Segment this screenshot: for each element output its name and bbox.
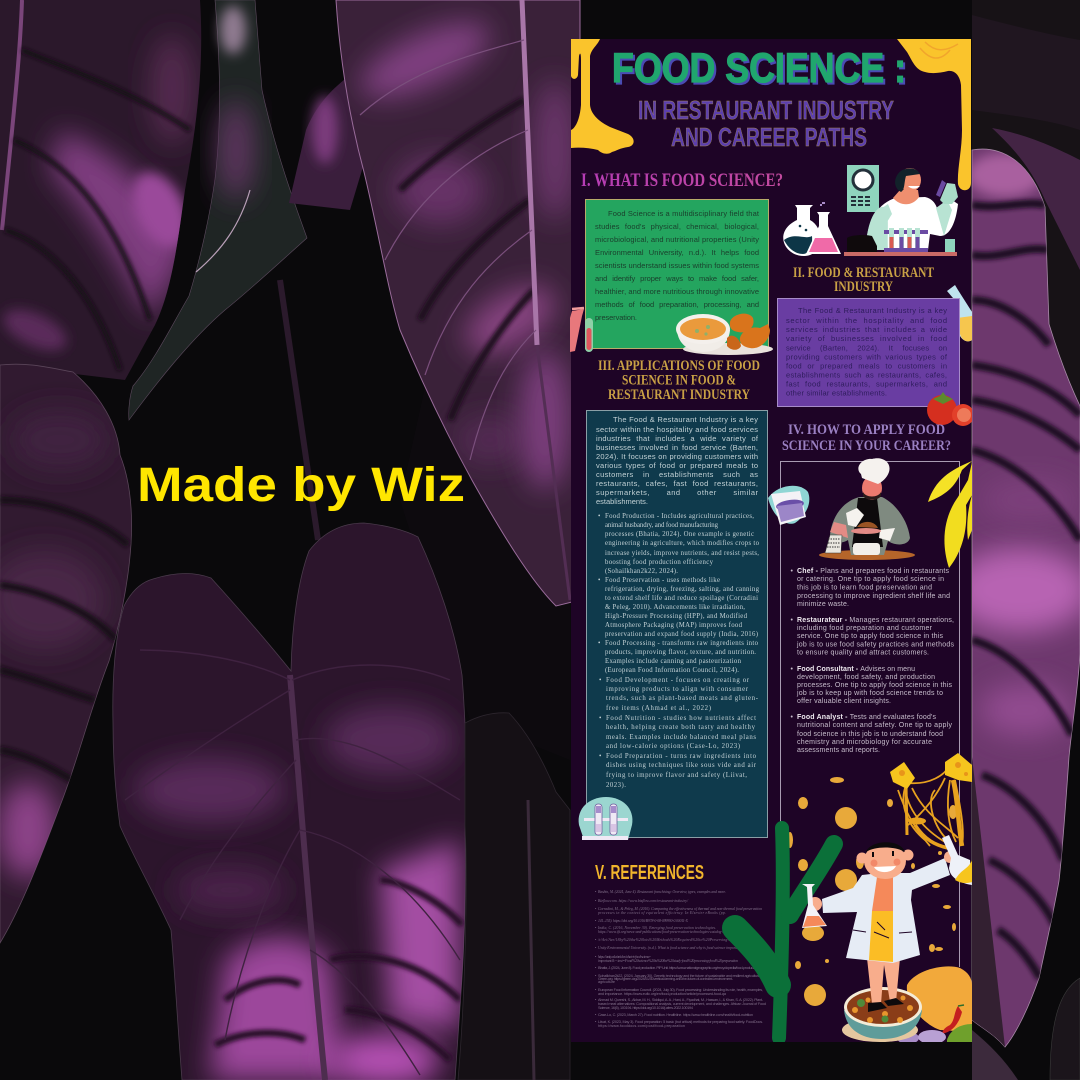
references list: Green.org. https://green.org/2024/01/30/vertical-farming-and-the-future-of-controlled-environment- [598, 977, 734, 981]
references list: Unity Environmental University. (n.d.). What is food science and why is food science important? [598, 946, 743, 950]
heading III: RESTAURANT INDUSTRY [608, 387, 750, 403]
references list: • [595, 998, 597, 1002]
bullet list: Food Production - Includes agricultural practices, [605, 513, 754, 520]
career list: • [790, 568, 794, 575]
intro text: various types of food or prepared meals to [596, 461, 758, 470]
references list: and importance. https://www.eufic.org/en/food-production/article/processed-food-qa [598, 992, 727, 996]
legs [867, 958, 900, 1004]
intro text [596, 415, 759, 506]
career list: Chef - Plans and prepares food in restaurants [797, 568, 950, 575]
body text: other similar establishments. [786, 388, 887, 398]
references list: agriculture [598, 980, 615, 984]
body text: food or prepared meals to customers in [786, 362, 947, 370]
references list: Bhatia, J. (2024, June 8). Food production. PIP Unit. https://www.nationalgeographic.org/encyclopedia/food-production [598, 966, 758, 970]
icon: yellow leaves [928, 461, 972, 568]
bullet list: boosting food production efficiency [605, 559, 714, 566]
career list: processes. One tip to apply food science in this [797, 682, 952, 689]
body text: fast food restaurants, supermarkets, and [786, 380, 947, 388]
references list: important/#:~:text=Food%20science%20is%20the%20study-food%20processing-food%20preparation [598, 959, 738, 963]
leaf: bottom centre [113, 523, 466, 1080]
references list: Bashin, M. (2024, June 4). Restaurant franchising: Overview, types, examples and more. [598, 890, 726, 895]
leaf: bottom right dark [458, 713, 570, 1080]
left flask [802, 884, 827, 928]
body text: providing customers with various types of [786, 352, 948, 362]
references list: processes in the context of equivalent efficiency. In Elsevier eBooks (pp. [597, 911, 726, 915]
career list: or catering. One tip to apply food science in [797, 576, 944, 583]
heading IV [782, 424, 950, 450]
references list: Ahmad M. Qureshi, S., Akbar, M. H., Siddiqui, A. A., Hani, A., Fiyadhat, M., Hassan, I., & Khan, S. A. (2022). Plant- [598, 998, 764, 1002]
career list: Food Analyst - Tests and evaluates food's [797, 714, 936, 721]
heading IV: IV. HOW TO APPLY FOOD [788, 422, 945, 438]
references list: 141–155). https://doi.org/10.1016/B978-0-08-099990-0.00011-X [598, 919, 689, 923]
heading III [598, 360, 760, 399]
bullet list: High-Pressure Processing (HPP), and Modified [605, 613, 748, 620]
bullet list: • [599, 753, 601, 760]
poster background [571, 39, 971, 1042]
illustration: chef [819, 458, 915, 560]
subtitle: AND CAREER PATHS [671, 122, 867, 152]
bullet list: Food Preparation - turns raw ingredients into [606, 753, 757, 760]
bullet list: • [599, 677, 601, 684]
leaf: small behind [289, 76, 368, 210]
body text: Environmental University, n.d.). It helps food [595, 248, 759, 257]
career list: • [790, 666, 794, 673]
bullet list: engineering in agriculture, which modifies crops to [605, 540, 760, 547]
bench [844, 252, 957, 256]
body text: sector within the hospitality and food [786, 316, 947, 325]
heading I: I. WHAT IS FOOD SCIENCE? [581, 170, 783, 191]
hands [808, 851, 956, 911]
references list: • [595, 1020, 597, 1024]
bullet list: • [598, 513, 600, 520]
references list: • [595, 955, 597, 959]
career list: assessments and reports. [797, 747, 880, 754]
bullet list: free items (Ahmad et al., 2022) [606, 705, 711, 712]
bullet list [598, 513, 760, 789]
career list: minimize waste. [797, 601, 849, 608]
bullet list: refrigeration, drying, freezing, salting, and canning [605, 586, 760, 593]
career list: Food Consultant - Advises on menu [797, 666, 915, 673]
references list: Science, 16(5), 100194. https://doi.org/10.1016/j.afres.2022.100194 [598, 1006, 693, 1010]
references list: • [595, 946, 597, 950]
bullet list: 2023). [606, 782, 626, 789]
bullet list: Food Preservation - uses methods like [605, 577, 720, 584]
panel: career box [780, 458, 960, 967]
intro text: The Food & Restaurant Industry is a key [613, 415, 758, 424]
leaf: centre stem [280, 280, 318, 540]
bullet list: processes (Bhatia, 2024). One example is genetic [605, 531, 754, 538]
intro text: industries that includes a wide variety of [596, 434, 759, 443]
body text: microbiological, and nutritional properties (Unity [595, 235, 759, 244]
intro text: 2024). It focuses on providing customers with [596, 452, 758, 461]
career list: this job is to learn food preservation and [797, 584, 932, 592]
illustration: melting cheese [890, 753, 972, 848]
body text: healthier, and more nutritious through innovative [595, 287, 759, 296]
body text: Food Science is a multidisciplinary field that [608, 209, 760, 218]
bullet list: increase yields, improve nutrients, and resist pests, [605, 550, 759, 557]
heading II: II. FOOD & RESTAURANT [793, 265, 934, 281]
body text: The Food & Restaurant Industry is a key [798, 306, 947, 315]
intro text: customers in establishments such as [596, 470, 758, 479]
heading V: V. REFERENCES [595, 862, 704, 884]
bullet list: Food Processing - transforms raw ingredients into [605, 640, 759, 647]
references list: • [595, 938, 597, 942]
references list: based meat alternatives: Compositional analysis, current development, and challenges. African Journal of Food [598, 1002, 766, 1006]
intro text: restaurants, cafes, fast food restaurants, [596, 479, 758, 488]
career list: service. One tip to apply food science in this [797, 633, 944, 640]
bullet list: • [599, 715, 601, 722]
references list: Sohailkhan2k22. (2024, January 30). Genetic technology and the future of sustainable and resilient agriculture. [598, 974, 761, 978]
title: FOOD SCIENCE : [612, 44, 906, 91]
bullet list: Atmosphere Packaging (MAP) improves food [605, 622, 743, 629]
intro text: establishments. [596, 497, 648, 506]
career list: development, food safety, and production [797, 674, 935, 681]
body text [595, 209, 760, 322]
references list: • [595, 919, 597, 923]
references list: • [595, 907, 597, 911]
bullet list: (European Food Information Council, 2024). [605, 667, 739, 674]
illustration: bread, chili and onion [897, 966, 972, 1044]
body text: and identify proper ways to make food safer, [595, 274, 759, 283]
heading IV: SCIENCE IN YOUR CAREER? [782, 438, 951, 454]
career list [790, 568, 954, 754]
bullet list: • [598, 640, 600, 647]
body text: establishments such as restaurants, cafes, [786, 370, 947, 380]
illustration: green plant [735, 828, 834, 1038]
career list: • [790, 617, 794, 624]
heading II: INDUSTRY [834, 279, 893, 295]
leaf: top left [0, 0, 201, 380]
body text [786, 306, 948, 398]
body text: variety of businesses involved in food [786, 334, 947, 343]
references list: /r/Aei/Aee/18by%20the%20lots%20Methods%20Required%20to%20Preserving%20Food [597, 938, 743, 942]
machine [847, 235, 877, 252]
panel: applications of food science [586, 410, 768, 838]
bullet list: health, helping create both tasty and healthy [606, 724, 756, 731]
career list: job is to keep up with food science trends to [796, 690, 943, 697]
bullet list: to extend shelf life and reduce spoilage (Corradini [605, 595, 758, 602]
bullet list: trends, such as plant-based meats and gluten- [606, 695, 759, 702]
illustration: scientist with flasks [783, 165, 958, 256]
career list: offer valuable client insights. [797, 698, 891, 705]
references list: • [595, 974, 597, 978]
career list: including food preparation and customer [797, 625, 933, 632]
intro text: sector within the hospitality and food services [596, 425, 758, 434]
career list: to ensure quality and attract customers. [797, 650, 929, 656]
references list: • [595, 988, 597, 992]
references list [595, 890, 766, 1028]
right flask [942, 835, 972, 885]
bullet list: Examples include canning and pasteurization [605, 658, 742, 665]
references list: European Food Information Council. (2024, July 30). Food processing: Understanding its role, health, examples, [598, 988, 763, 992]
career list: processing to improve ingredient shelf life and [797, 593, 950, 600]
bullet list: products, improving flavor, texture, and nutrition. [605, 649, 756, 656]
bullet list: preservation and expand food supply (India, 2016) [605, 631, 758, 638]
leaf: far right [972, 0, 1080, 1080]
chart card [847, 165, 879, 212]
career list: chemistry and microbiology for accurate [797, 739, 932, 746]
references list: https://www.fooddocs.com/post/food-preparation [598, 1024, 685, 1028]
body text: preservation. [595, 313, 637, 322]
references list: • [595, 1013, 597, 1017]
leaf: small central dark [129, 0, 307, 420]
test tube rack [884, 228, 955, 252]
title [614, 52, 906, 146]
bullet list: frying to improve flavor and safety (Liivat, [606, 772, 747, 779]
icon: flask right edge [947, 285, 972, 341]
references list: Case-Lo, C. (2023, March 27). Food nutrition. Healthline. https://www.healthline.com/health/food-nutrition [598, 1013, 753, 1017]
bullet list: & Peleg, 2010). Advancements like irradiation, [605, 604, 745, 611]
subtitle: IN RESTAURANT INDUSTRY [638, 95, 894, 125]
references list: https://www.ift.org/news-and-publications/food-preservation-technologies-catalog-2016 [598, 930, 730, 934]
body text: studies food's physical, chemical, biological, [595, 222, 759, 231]
intro text: businesses involved in food service (Barten, [596, 443, 758, 452]
icon: tomatoes [927, 392, 974, 426]
references list: • [595, 966, 597, 970]
body text: service (Barten, 2024). It focuses on [786, 344, 947, 352]
subtitle [639, 100, 894, 146]
bullet list: Food Nutrition - studies how nutrients affect [606, 715, 756, 722]
career list: food science in this job is to understand food [797, 731, 943, 738]
illustration: girl scientist [802, 835, 972, 1012]
career list: • [790, 714, 794, 721]
leaf: top right centre [336, 0, 580, 606]
head [856, 842, 914, 879]
bullet list: improving products to align with consumer [606, 686, 749, 693]
conical flask [806, 202, 841, 254]
bullet list: Food Development - focuses on creating or [606, 677, 750, 684]
body text: scientists understand issues within food systems [595, 261, 759, 270]
references list: • [595, 890, 597, 894]
coat [822, 858, 950, 963]
drip: top left [571, 39, 634, 154]
references list: Corradini, M., & Peleg, M. (2010). Comparing the effectiveness of thermal and non-thermal food preservation [598, 907, 762, 912]
leaf: middle left [0, 364, 132, 943]
career list: job is to use food safety practices and methods [796, 642, 954, 648]
references list: https://unity.edu/articles/what-is-food-science- [598, 955, 652, 959]
icon: soup bowl and fried chicken [676, 314, 773, 355]
panel: food and restaurant industry [778, 298, 960, 406]
body text: methods of food preparation, processing, and [595, 300, 759, 309]
heading III: SCIENCE IN FOOD & [622, 372, 736, 388]
bullet list: and low-calorie options (Case-Lo, 2023) [606, 743, 740, 750]
poster [570, 39, 974, 1044]
bullet list: • [598, 577, 600, 584]
body text: services industries that includes a wide [786, 325, 947, 334]
bullet list: animal husbandry, and food manufacturing [605, 522, 719, 529]
bullet list: (Sohailkhan2k22, 2024). [605, 568, 678, 575]
icon: test tube rack badge [579, 797, 632, 840]
bullet list: dishes using techniques like sous vide and air [606, 762, 757, 769]
decorative gold dots [787, 777, 957, 1006]
references list: • [595, 926, 597, 930]
icon: measuring beaker [768, 486, 809, 525]
shirt and skirt [872, 877, 893, 912]
panel: what is food science [586, 200, 768, 348]
heading III: III. APPLICATIONS OF FOOD [598, 358, 760, 374]
icon: test tubes [570, 308, 593, 352]
woman [866, 168, 958, 250]
career list: nutritional content and safety. One tip to apply [797, 722, 952, 729]
references list: • [595, 899, 597, 903]
drip: top right [897, 39, 971, 190]
bullet list: meals. Examples include balanced meal plans [606, 734, 756, 741]
intro text: supermarkets, and other similar [596, 488, 758, 497]
illustration: stew bowl [842, 987, 922, 1042]
references list: Bizflow.com. https://www.bizflow.com/restaurant-industry/ [598, 899, 689, 903]
round flask [783, 205, 820, 256]
references list: Liivat, K. (2023, May 3). Food preparation: 5 basic (but critical) methods for preparing food safely. FoodDocs. [598, 1020, 763, 1024]
heading II [793, 268, 934, 291]
caption: Made by Wiz: Made by Wiz [137, 459, 465, 512]
references list: India, C. (2016, November 30). Emerging food preservation technologies. [597, 926, 716, 931]
career list: Restaurateur - Manages restaurant operations, [797, 617, 954, 624]
